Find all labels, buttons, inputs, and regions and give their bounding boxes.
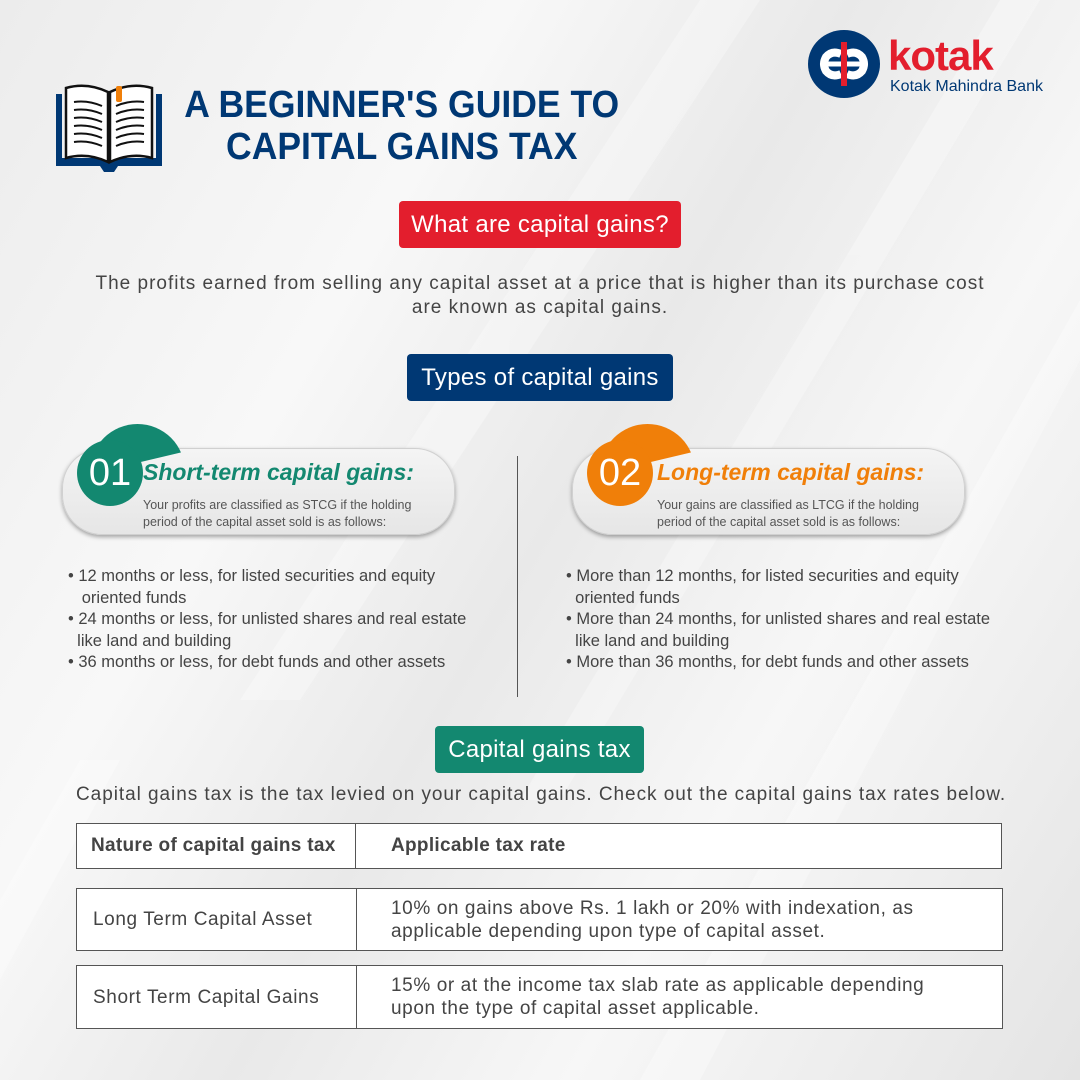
list: STCG conditions: like land and building [77, 632, 231, 650]
list: LTCG conditions: like land and building [575, 632, 729, 650]
list: STCG conditions: • 36 months or less, for debt funds and other assets [68, 653, 445, 671]
icon: 02 badge [610, 424, 691, 462]
list: STCG conditions: • 12 months or less, for listed securities and equity [68, 567, 435, 585]
list: STCG conditions [68, 567, 466, 671]
logo: Kotak Mahindra Bank [890, 78, 1043, 95]
list: STCG conditions: • 24 months or less, for unlisted shares and real estate [68, 610, 466, 628]
row: short term: Short Term Capital Gains [93, 987, 319, 1008]
table header: Applicable tax rate [391, 835, 566, 856]
definition text [95, 273, 985, 318]
row: short term [76, 965, 1003, 1029]
panel: long-term [566, 424, 990, 671]
heading: capital gains tax [435, 726, 644, 773]
heading: capital gains tax: Capital gains tax [448, 736, 631, 763]
row: short term: upon the type of capital asset applicable. [391, 998, 760, 1019]
row: long term: Long Term Capital Asset [93, 909, 312, 930]
card: STCG: Your profits are classified as STCG if the holding [143, 498, 411, 512]
table header: Nature of capital gains tax [91, 835, 336, 856]
row: long term [76, 888, 1003, 951]
logo text: kotak [888, 32, 993, 79]
row: long term: 10% on gains above Rs. 1 lakh or 20% with indexation, as [391, 898, 914, 919]
divider [517, 456, 518, 697]
intro text: Capital gains tax is the tax levied on your capital gains. Check out the capital gains tax rates below. [76, 784, 1006, 805]
row: long term: applicable depending upon type of capital asset. [391, 921, 825, 942]
table [76, 823, 1003, 1029]
title: A BEGINNER'S GUIDE TO [184, 84, 619, 126]
list: LTCG conditions: • More than 12 months, for listed securities and equity [566, 567, 959, 585]
heading: what are capital gains [399, 201, 681, 248]
heading: types of capital gains [407, 354, 673, 401]
card: STCG: Short-term capital gains: [143, 459, 414, 485]
panel: short-term: 01 [89, 452, 131, 494]
icon: 01 badge [100, 424, 181, 462]
card: LTCG: period of the capital asset sold is as follows: [657, 515, 900, 529]
definition text: The profits earned from selling any capital asset at a price that is higher than its purchase cost [95, 273, 985, 294]
logo [808, 30, 1043, 98]
card: LTCG: Long-term capital gains: [657, 459, 924, 485]
logo mark [808, 30, 880, 98]
list: LTCG conditions [566, 567, 990, 671]
heading: what are capital gains: What are capital gains? [411, 211, 669, 238]
table header [76, 823, 1002, 869]
list: LTCG conditions: • More than 24 months, for unlisted shares and real estate [566, 610, 990, 628]
list: LTCG conditions: • More than 36 months, for debt funds and other assets [566, 653, 969, 671]
heading: types of capital gains: Types of capital gains [421, 364, 659, 391]
row: short term: 15% or at the income tax slab rate as applicable depending [391, 975, 924, 996]
icon: book [56, 84, 162, 172]
list: LTCG conditions: oriented funds [575, 589, 680, 607]
title: CAPITAL GAINS TAX [226, 126, 577, 168]
definition text: are known as capital gains. [412, 296, 668, 318]
list: STCG conditions: oriented funds [82, 589, 186, 607]
card: LTCG: Your gains are classified as LTCG if the holding [657, 498, 919, 512]
panel: long-term: 02 [599, 452, 641, 494]
title [184, 84, 619, 168]
card: STCG [62, 448, 455, 535]
card: LTCG [572, 448, 965, 535]
card: STCG: period of the capital asset sold is as follows: [143, 515, 386, 529]
panel: short-term [59, 424, 466, 671]
